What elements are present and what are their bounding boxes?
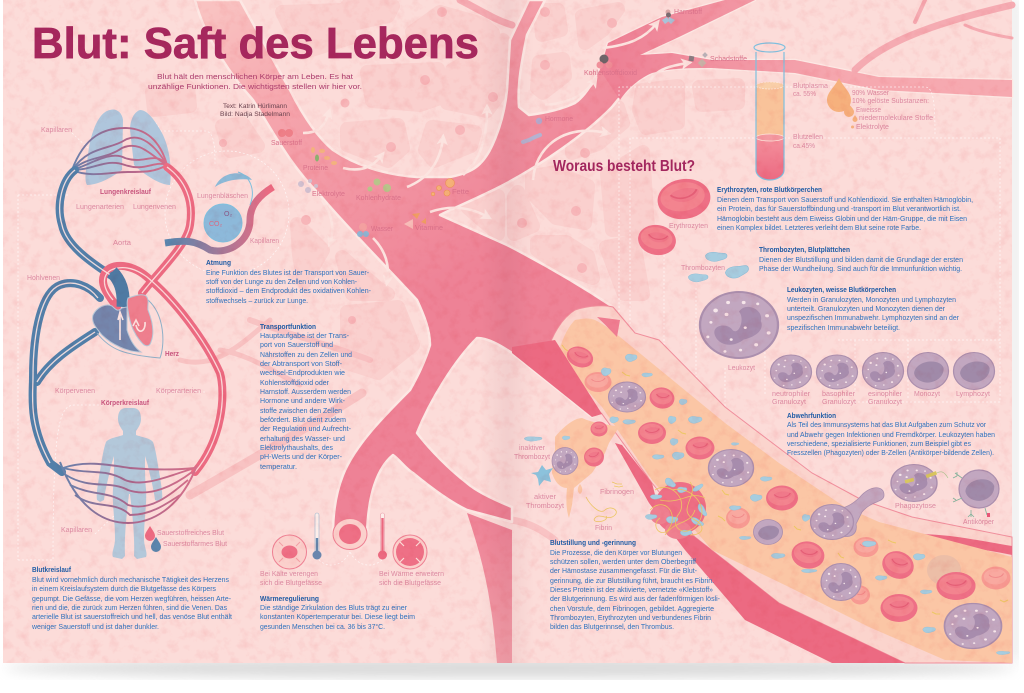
heading: Woraus besteht Blut: Woraus besteht Blut? [553,158,695,175]
labels: clotting: Thrombozyt [526,503,564,510]
labels: test tube: Blutplasma [793,83,828,90]
text: Blutstillung: gerinnung, die zur Blutstillung führt, braucht es Fibrin. [550,576,714,585]
nutrient arrows [303,23,688,282]
labels: clotting: Fibrin [595,525,612,532]
text: Erythrozyten: Erythrozyten, rote Blutkörperchen [717,185,822,194]
icon: large leukocyte [700,292,778,358]
labels left diagram: Körpervenen [55,388,95,395]
text: Transportfunktion: der Abtransport von Stoff- [260,359,343,368]
text: Thrombozyten: Phase der Wundheilung. Sind auch für die Immunfunktion wichtig. [759,264,962,273]
text: Erythrozyten: Hämoglobin besteht aus dem Eiweiss Globin und der Häm-Gruppe, die mit Eisen [717,214,967,223]
temperature captions: Bei Wärme erweitern [379,571,444,578]
text: Blutkreislauf: Blut wird vornehmlich durch mechanische Tätigkeit des Herzens [32,575,229,584]
text: Leukozyten: spezifischen Immunabwehr beteiligt. [787,323,900,332]
blood vessel: main trunk [195,0,1012,534]
leukocyte types row: basophiler [822,391,856,398]
text: Wärmeregulierung: konstanten Köpertemperatur bei. Diese liegt beim [260,612,415,621]
text: Transportfunktion: Transportfunktion [260,322,316,331]
leukocyte types row: Granulozyt [772,399,806,406]
text: Leukozyten: unterteilt. Granulozyten und Monozyten dienen der [787,304,946,313]
labels: test tube: ca.45% [793,143,815,150]
text: Transportfunktion: temperatur. [260,462,297,471]
text: Wärmeregulierung: Wärmeregulierung [260,594,319,603]
temperature captions: sich die Blutgefässe [260,580,322,587]
text: Transportfunktion: stoffe zwischen den Zellen [260,406,342,415]
leukocyte types row: Monozyt [914,391,940,398]
text: Blutstillung: Thrombozyten, Erythrozyten und verbundenes Fibrin [550,613,711,622]
lung capillary network [72,128,167,174]
icon: warm vessel [393,535,427,569]
white blood cells [552,382,1002,648]
credits: Text: Katrin Hürlimann [223,104,287,110]
labels left diagram: Hohlvenen [27,275,60,282]
labels: nutrients: Elektrolyte [312,191,345,198]
dashed callout lines [18,87,1000,565]
icon: plasma drops [827,78,858,128]
labels: nutrients: Harnstoff [674,9,702,16]
text: Blutstillung [550,538,721,631]
leukocyte types row: neutrophiler [772,391,811,398]
text: Transportfunktion: Kohlenstoffdioxid oder [260,378,330,387]
labels left diagram: Kapillaren [41,127,72,134]
intro text: unzählige Funktionen. Die wichtigsten stellen wir hier vor. [148,82,362,91]
labels: test tube: ca. 55% [793,91,816,98]
text: Transportfunktion [259,322,352,471]
credits: Bild: Nadja Stadelmann [220,112,290,118]
text: Blutkreislauf: Blutkreislauf [32,565,72,574]
icon: heart [93,272,163,358]
text: Blutkreislauf [31,565,232,631]
temperature captions: Bei Kälte verengen [260,571,318,578]
pale side branches [180,320,555,540]
icon: alveolus [165,172,273,251]
credits [220,104,290,118]
text: Abwehrfunktion: Fresszellen (Phagozyten) oder B-Zellen (Antikörper-bildende Zellen). [787,448,994,457]
text: Blutkreislauf: weniger Sauerstoff und ist daher dunkler. [31,622,159,631]
fibrinogen strands in plasma [562,345,1008,614]
leukocyte types row: Lymphozyt [956,391,990,398]
text: Transportfunktion: Nährstoffen zu den Zellen und [260,350,352,359]
text: Transportfunktion: Hauptaufgabe ist der Trans- [260,331,350,340]
labels: clotting: Fibrinogen [600,489,634,496]
labels left diagram: Kapillaren [61,527,92,534]
labels: clotting [514,437,634,532]
label: Antikörper: Antikörper [963,519,995,526]
circulation: centre lines [33,167,222,472]
text: Leukozyten: Leukozyten, weisse Blutkörperchen [787,285,896,294]
labels: test tube [793,83,933,150]
text: Transportfunktion: port von Sauerstoff und [260,340,333,349]
temperature captions [260,571,444,587]
blood vessel: right band overlay [600,0,1012,100]
text: Erythrozyten: ein Protein, das für Sauerstoffbindung und -transport im Blut verantwortlich ist. [717,204,961,213]
icons: nutrients [278,129,454,237]
text: Abwehrfunktion: Als Teil des Immunsystems hat das Blut Aufgaben zum Schutz vor [787,420,987,429]
text: Wärmeregulierung: gesunden Menschen bei ca. 36 bis 37°C. [260,622,385,631]
text: Blutstillung: der Hämostase zusammengefasst. Für die Blut- [550,566,698,575]
temperature captions: sich die Blutgefässe [379,580,441,587]
dark wedge upper wall [900,534,1012,555]
text: Atmung: Eine Funktion des Blutes ist der Transport von Sauer- [206,268,370,277]
text: Leukozyten: Werden in Granulozyten, Monozyten und Lymphozyten [787,295,956,304]
icon: human body [97,408,162,559]
text: Erythrozyten: einen Komplex bildet. Letzteres verleiht dem Blut seine rote Farbe. [717,223,921,232]
text: Blutkreislauf: gepumpt. Die Gefässe, die vom Herzen wegführen, heissen Arte- [32,594,232,603]
vessel cut opening [333,518,367,550]
text: Transportfunktion: befördert. Blut dient zudem [260,415,346,424]
text: Blutkreislauf: rien und die, die zurück zum Herzen führen, sind die Venen. Das [32,603,227,612]
phagocyte amoeba [810,488,884,540]
icon: warm thermometer [378,513,387,560]
text: Transportfunktion: Hormone und andere Wirk- [260,396,346,405]
text: Leukozyten [787,285,960,332]
gutter shading [480,0,534,663]
labels: test tube: 10% gelöste Substanzen: [852,98,929,105]
label: Erythrozyten: Erythrozyten [669,223,708,230]
platelets [562,354,1010,655]
labels: clotting: inaktiver [519,445,546,452]
labels left diagram: Lungenkreislauf [100,189,152,196]
tissue cells [152,6,738,373]
text: Abwehrfunktion: verschiedene, spezialisierte Funktionen, zum Beispiel gibt es [787,439,971,448]
icon: cold vessel [272,535,306,569]
labels left diagram: Kapillaren [250,238,279,245]
icons: thrombocytes [688,252,750,282]
text: Leukozyten: unspezifischen Immunabwehr. Lymphozyten sind an der [787,313,960,322]
text: Blutstillung: chen Vorstufe, dem Fibrinogen, gebildet. Aggregierte [550,604,714,613]
labels: nutrients: Wasser [371,226,394,233]
blood clot [645,477,708,539]
labels: test tube: niedermolekulare Stoffe [859,115,933,122]
test tube [754,43,785,180]
text: Atmung: stoff von der Lunge zu den Zellen und von Kohlen- [206,277,358,286]
circulation: arteries [103,167,222,472]
cell nuclei [219,7,617,324]
labels left diagram: Lungenvenen [133,204,176,211]
labels: nutrients: Kohlenhydrate [356,195,401,202]
text: Blutstillung: Blutstillung und -gerinnung [550,538,636,547]
icon: antibody cell [953,470,999,517]
icons: waste, CO2, hormones [523,10,708,142]
labels: nutrients: Vitamine [415,225,443,232]
text: Erythrozyten [717,185,973,232]
labels left diagram: Herz [165,351,179,358]
labels: test tube: 90% Wasser [852,90,890,97]
leukocyte types row [770,352,994,406]
text: Atmung [206,258,372,305]
text: Blutkreislauf: in einem Kreislaufsystem durch die Blutgefässe des Körpers [32,584,216,593]
text: Blutstillung: Die Prozesse, die den Körper vor Blutungen [550,548,682,557]
labels: test tube: Elektrolyte [856,124,889,131]
labels: nutrients: Kohlenstoffdioxid [584,70,637,77]
text: Blutstillung: der Blutgerinnung. Es wird aus der fadenförmigen lösli- [550,594,721,603]
icon: alveolus: CO₂ [209,221,222,228]
leukocyte types row: esinophiler [868,391,903,398]
label: Thrombozyten: Thrombozyten [681,265,725,272]
leukocyte types row: Granulozyt [822,399,856,406]
text: Abwehrfunktion: und Abwehr gegen Infektionen und Fremdkörper. Leukozyten haben [787,430,995,439]
text: Transportfunktion: wechsel-Endprodukten wie [259,368,345,377]
red blood cells [564,343,1010,622]
text: Transportfunktion: Elektrolythaushalts, des [260,443,333,452]
icon: alveolus: O₂ [224,211,232,218]
text: Blutstillung: bilden das Blutgerinnsel, den Thrombus. [550,622,674,631]
text: Blutkreislauf: arterielle Blut ist sauerstoffreich und hell, das venöse Blut enthält [32,612,232,621]
text: Transportfunktion: erhaltung des Wasser- und [260,434,345,443]
labels: test tube: Eiweisse [856,107,881,114]
text: Erythrozyten: Dienen dem Transport von Sauerstoff und Kohlendioxid. Sie enthalten Hämoglobin, [717,195,973,204]
blood vessel cross section [512,306,1012,663]
labels left diagram: Körperkreislauf [101,400,150,407]
text: Transportfunktion: pH-Werts und der Körper- [260,452,343,461]
legend: blood types: Sauerstoffreiches Blut [157,530,224,537]
text: Atmung: Atmung [206,258,231,267]
labels: nutrients: Fette [452,189,469,196]
labels: nutrients [271,9,747,233]
text: Abwehrfunktion: Abwehrfunktion [787,411,836,420]
vessel outer wall [545,306,1012,663]
upper wall cap [597,317,620,337]
labels left diagram: Lungenarterien [76,204,124,211]
icon: phagocytosis [891,464,948,502]
labels: nutrients: Hormone [545,116,573,123]
text: Thrombozyten: Dienen der Blutstillung und bilden damit die Grundlage der ersten [759,255,963,264]
text: Thrombozyten [759,245,963,273]
legend: blood types [145,526,227,552]
labels: clotting: Thrombozyt [514,454,550,461]
labels: nutrients: Proteine [303,165,328,172]
text: Blutstillung: Dieses Protein ist der aktivierte, vernetzte «Klebstoff» [550,585,713,594]
labels: nutrients: Schadstoffe [710,56,747,63]
labels: test tube: Blutzellen [793,134,823,141]
text: Wärmeregulierung: Die ständige Zirkulation des Bluts trägt zu einer [260,603,408,612]
label: Phagozytose: Phagozytose [895,503,936,510]
icon: cold thermometer [312,513,322,560]
leukocyte types row: Granulozyt [868,399,902,406]
text: Transportfunktion: Harnstoff. Ausserdem werden [260,387,351,396]
legend: blood types: Sauerstoffarmes Blut [163,541,227,548]
labels left diagram: Lungenbläschen [197,193,248,200]
icon: lungs [85,109,171,185]
plasma [557,318,1012,663]
labels: clotting: aktiver [534,494,557,501]
labels left diagram [27,127,279,534]
labels left diagram: Aorta [113,240,131,247]
title: Blut: Saft des Lebens [32,19,479,68]
icons: erythrocytes [636,176,713,258]
text: Blutstillung: schützen sollen, werden unter dem Oberbegriff [550,557,696,566]
intro text [148,72,362,91]
text: Thrombozyten: Thrombozyten, Blutplättchen [759,245,850,254]
label: Leukozyt: Leukozyt [728,365,755,372]
blood vessel: upper right branches [460,0,1012,70]
intro text: Blut hält den menschlichen Körper am Leben. Es hat [157,72,354,81]
text: Wärmeregulierung [260,594,415,631]
labels: nutrients: Sauerstoff [271,140,302,147]
dark lower wall [615,443,905,663]
blood vessel: lower branch [467,513,512,663]
lower capillary network [60,462,197,523]
text: Atmung: stoffdioxid – dem Endprodukt des oxidativen Kohlen- [206,286,372,295]
circulation: veins [33,170,115,472]
labels left diagram: Körperarterien [156,388,201,395]
text: Transportfunktion: der Regulation und Aufrecht- [260,424,352,433]
leaking blood [552,418,619,518]
text: Atmung: stoffwechsels – zurück zur Lunge. [206,296,308,305]
text: Abwehrfunktion [787,411,995,457]
